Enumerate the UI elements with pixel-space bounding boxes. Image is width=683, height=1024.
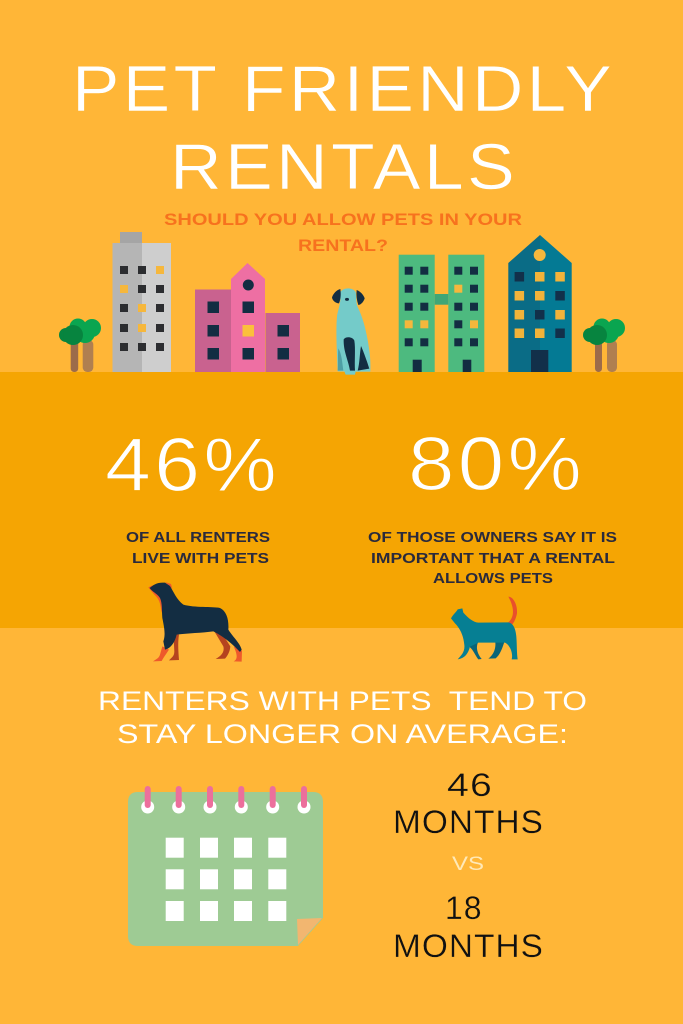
title: RENTALS (170, 130, 518, 203)
heading: renters stay longer: STAY LONGER ON AVERAGE: (117, 719, 568, 749)
statistic: 46 percent: 46% (105, 423, 280, 508)
subtitle (164, 210, 522, 255)
text: vs: VS (452, 854, 484, 875)
text: owners say: IMPORTANT THAT A RENTAL (371, 551, 615, 567)
icon: gray tower (112, 232, 171, 372)
icon: blue gabled building (508, 235, 572, 372)
icon: rottweiler (148, 582, 242, 662)
text: renters with pets: OF ALL RENTERS (126, 530, 270, 546)
stat: 18 months: MONTHS (393, 928, 544, 964)
subtitle: RENTAL? (298, 236, 388, 255)
text: renters with pets (126, 530, 270, 567)
stat: 46 months: 46 (447, 767, 493, 803)
title: PET FRIENDLY (72, 52, 615, 125)
stat: 46 months: MONTHS (393, 804, 544, 840)
text: owners say: OF THOSE OWNERS SAY IT IS (368, 530, 617, 546)
icon: cat (451, 597, 518, 659)
text: renters with pets: LIVE WITH PETS (132, 551, 269, 567)
icon: left trees (59, 318, 101, 372)
text: owners say (368, 530, 617, 587)
text: owners say: ALLOWS PETS (433, 571, 553, 587)
stat: 18 months (393, 890, 544, 964)
icon: calendar (128, 786, 323, 946)
icon: pink building (195, 263, 300, 372)
icon: green twin towers (399, 255, 484, 372)
title (72, 52, 615, 203)
stat: 18 months: 18 (445, 890, 483, 926)
icon: sitting dog (332, 288, 370, 375)
heading: renters stay longer: RENTERS WITH PETS TEND TO (98, 686, 587, 716)
heading: renters stay longer (98, 686, 587, 749)
stat: 46 months (393, 767, 544, 840)
subtitle: SHOULD YOU ALLOW PETS IN YOUR (164, 210, 522, 229)
icon: right trees (583, 318, 625, 372)
statistic: 80 percent: 80% (408, 422, 585, 507)
panel: statistics band (0, 372, 683, 628)
